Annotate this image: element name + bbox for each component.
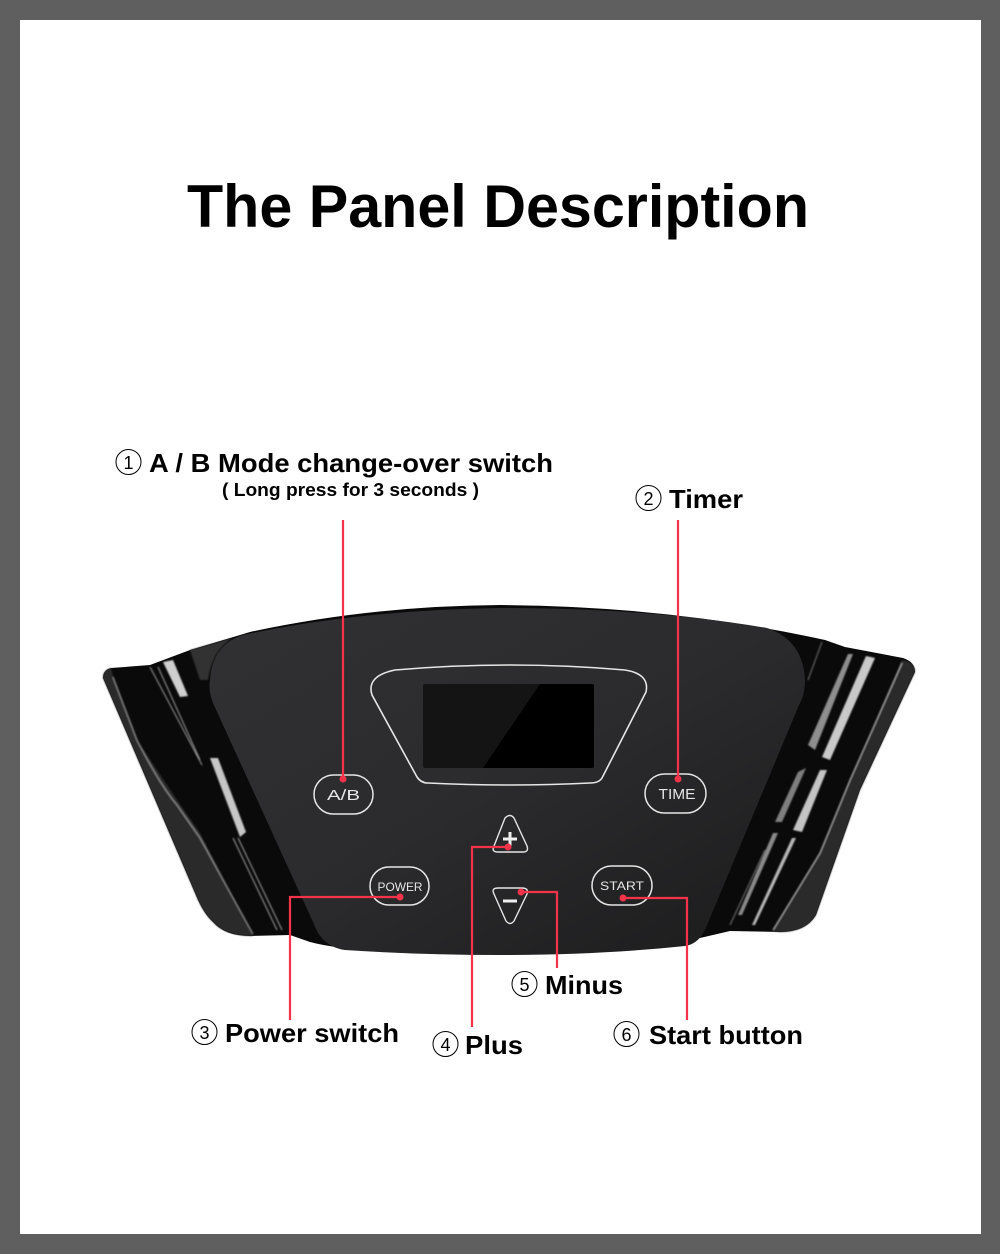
label 1: A / B Mode change-over switch: A / B Mode change-over switch: [149, 448, 553, 478]
button: minus: [493, 888, 527, 924]
title: The Panel Description: [187, 173, 809, 240]
matte face plate: [209, 608, 805, 955]
right grip: [730, 642, 915, 932]
button: plus: [493, 816, 528, 852]
label 5: Minus: 5: [519, 975, 530, 995]
button: POWER: [370, 867, 429, 905]
label 4: Plus: 4: [440, 1035, 451, 1055]
label 6: Start button: 6: [621, 1025, 632, 1045]
label 4: Plus: [433, 1030, 523, 1060]
label 2: Timer: 2: [643, 489, 654, 509]
label 3: Power switch: 3: [199, 1023, 210, 1043]
leader line: Start button: [620, 894, 687, 1020]
device body silhouette: [103, 605, 915, 954]
device control panel: [103, 605, 915, 955]
label 3: Power switch: Power switch: [225, 1018, 399, 1048]
button: A/B: A/B: [327, 787, 360, 804]
label 1: A / B Mode change-over switch: 1: [123, 453, 134, 473]
button: A/B: [314, 775, 373, 814]
leader line: A/B: [340, 520, 346, 782]
button: START: START: [600, 879, 645, 893]
button: TIME: TIME: [658, 786, 696, 803]
label 1: A / B Mode change-over switch: [116, 448, 553, 500]
leader line: Minus: [518, 888, 557, 968]
label 5: Minus: [512, 970, 623, 1000]
leader line: Plus: [472, 844, 512, 1027]
label 4: Plus: Plus: [465, 1030, 523, 1060]
label 2: Timer: Timer: [669, 484, 743, 514]
display outline: [371, 665, 647, 785]
display reflection: [483, 684, 594, 768]
button: POWER: POWER: [378, 880, 423, 894]
left grip: [103, 638, 282, 936]
leader line: Timer: [674, 520, 682, 782]
button: TIME: [645, 774, 706, 813]
leader line: Power switch: [290, 894, 404, 1020]
label 5: Minus: Minus: [545, 970, 623, 1000]
display screen: [423, 684, 594, 768]
button: START: [592, 866, 652, 905]
label 2: Timer: [636, 484, 743, 514]
label 1: A / B Mode change-over switch: ( Long press for 3 seconds ): [222, 480, 479, 500]
label 6: Start button: Start button: [649, 1020, 803, 1050]
